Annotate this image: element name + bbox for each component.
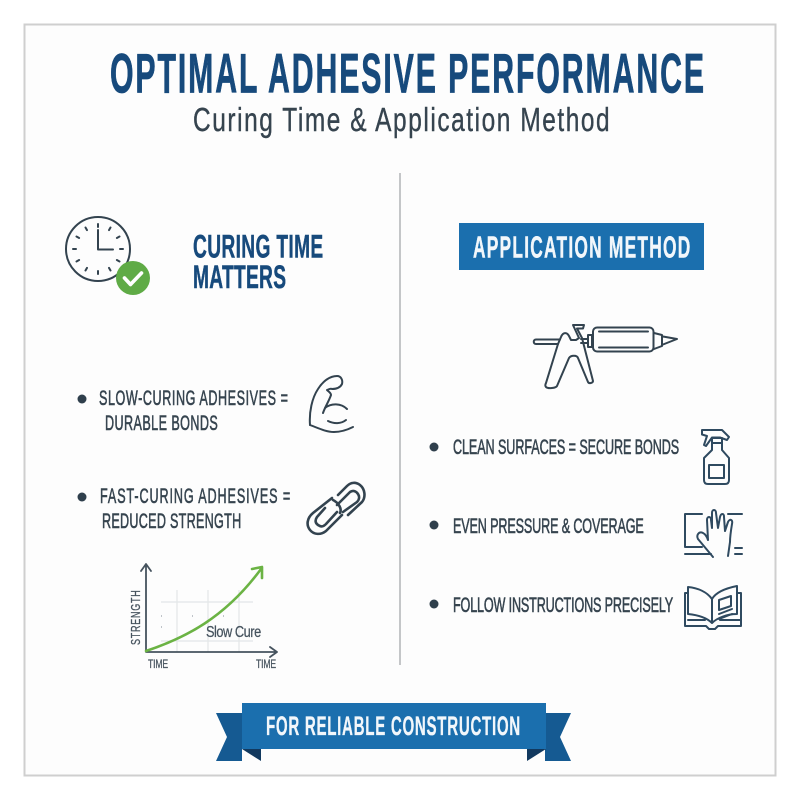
- heading: application method: [459, 223, 704, 270]
- bullet: even pressure: EVEN PRESSURE & COVERAGE: [453, 514, 644, 538]
- bullet: follow instructions: FOLLOW INSTRUCTIONS PRECISELY: [453, 593, 674, 617]
- icon: flexed arm: [310, 376, 353, 432]
- icon: open book: [685, 586, 741, 629]
- panel: application method: [430, 223, 742, 629]
- icon: clock with check: [66, 217, 150, 295]
- icon: hand on surface: [685, 510, 742, 557]
- bullet: slow-curing: SLOW-CURING ADHESIVES =: [99, 386, 288, 410]
- chart: strength over time: TIME: [148, 659, 168, 671]
- icon: spray bottle: [702, 430, 729, 484]
- bullet: fast-curing: REDUCED STRENGTH: [102, 509, 241, 533]
- title: OPTIMAL ADHESIVE PERFORMANCE: [110, 41, 704, 105]
- heading: curing time matters: [193, 228, 323, 295]
- banner: for reliable construction: FOR RELIABLE CONSTRUCTION: [266, 710, 520, 741]
- heading: application method: APPLICATION METHOD: [473, 230, 690, 265]
- heading: curing time matters: CURING TIME: [193, 228, 323, 265]
- chart: strength over time: Slow Cure: [206, 624, 261, 641]
- chart: strength over time: STRENGTH: [130, 590, 143, 645]
- bullet: slow-curing: DURABLE BONDS: [105, 411, 218, 435]
- icon: chain link: [308, 483, 364, 534]
- bullet: fast-curing: FAST-CURING ADHESIVES =: [100, 484, 290, 508]
- banner: for reliable construction: [216, 703, 571, 761]
- subtitle: Curing Time & Application Method: [193, 103, 610, 139]
- chart: strength over time: [130, 564, 277, 671]
- icon: caulking gun: [534, 325, 677, 388]
- bullet: clean surfaces: CLEAN SURFACES = SECURE BONDS: [453, 435, 679, 459]
- bullet: fast-curing: [78, 484, 290, 533]
- panel: curing time: [66, 217, 364, 671]
- heading: curing time matters: MATTERS: [193, 259, 286, 295]
- chart: strength over time: TIME: [256, 659, 276, 671]
- bullet: slow-curing: [78, 386, 288, 435]
